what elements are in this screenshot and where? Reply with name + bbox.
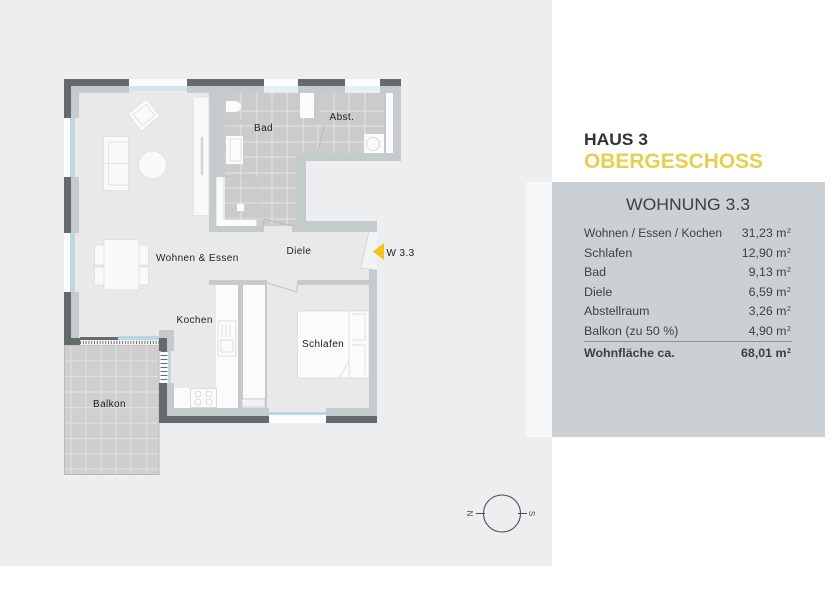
shower glass (223, 176, 257, 220)
row: total (584, 346, 791, 360)
row: Balkon: 2 (787, 326, 791, 333)
dining chairs (94, 245, 148, 285)
panel: apartment areas (552, 182, 825, 437)
row: Schlafen (584, 246, 791, 260)
row: Bad: Bad (584, 265, 606, 279)
row: Schlafen: Schlafen (584, 246, 632, 260)
toilet (226, 101, 241, 112)
row: Wohnen/Essen/Kochen: Wohnen / Essen / Kochen (584, 226, 722, 240)
row: Abstellraum: 3,26 m (749, 304, 786, 318)
row: Abstellraum: Abstellraum (584, 304, 649, 318)
row: Diele: 2 (787, 287, 791, 294)
dining table (104, 240, 139, 290)
round table (138, 151, 166, 179)
row: total: Wohnfläche ca. (584, 346, 675, 360)
shower tray (217, 177, 256, 226)
balcony (64, 345, 159, 475)
room labels (93, 112, 415, 410)
row: Bad: 9,13 m (749, 265, 786, 279)
compass S: S (527, 511, 536, 516)
row: total: 2 (787, 348, 791, 355)
title: Haus 3: HAUS 3 (584, 130, 648, 149)
light strip beside panel (526, 182, 552, 437)
row: Diele (584, 285, 791, 299)
interior and light walls (71, 86, 401, 416)
row: Diele: 6,59 m (749, 285, 786, 299)
compass N: N (465, 511, 474, 517)
row: Bad (584, 265, 791, 279)
floor plan (64, 79, 415, 475)
row: Wohnen/Essen/Kochen: 31,23 m (742, 226, 786, 240)
row: Balkon: Balkon (zu 50 %) (584, 324, 678, 338)
bed (298, 311, 369, 378)
row: Balkon (584, 324, 791, 338)
label: Bad: Bad (254, 123, 273, 134)
panel heading: WOHNUNG 3.3 (626, 195, 750, 214)
row: Bad: 2 (787, 267, 791, 274)
interior floor (71, 86, 377, 416)
row: Diele: Diele (584, 285, 612, 299)
closet (243, 285, 265, 398)
row: Wohnen/Essen/Kochen: 2 (787, 228, 791, 235)
label: Balkon: Balkon (93, 399, 126, 410)
kitchen counters (174, 285, 238, 408)
icon: entrance arrow (373, 243, 384, 260)
door swings (263, 125, 377, 292)
bathroom fixtures (217, 93, 393, 226)
row: total: 68,01 m (741, 346, 786, 360)
sofa (104, 136, 128, 190)
stove (190, 388, 216, 408)
title: Obergeschoss: OBERGESCHOSS (584, 150, 763, 173)
plan background panel (0, 0, 552, 566)
row: Abstellraum (584, 304, 791, 318)
living room furniture (94, 97, 209, 290)
armchair (128, 99, 160, 131)
label: W 3.3: W 3.3 (386, 248, 415, 259)
storage shelf (386, 93, 393, 153)
row: Schlafen: 12,90 m (742, 246, 786, 260)
row: Abstellraum: 2 (787, 306, 791, 313)
shower drain (237, 204, 244, 211)
label: Wohnen & Essen: Wohnen & Essen (156, 253, 239, 264)
kitchen (174, 285, 265, 408)
row: Schlafen: 2 (787, 248, 791, 255)
label: Kochen: Kochen (176, 315, 213, 326)
wardrobe (193, 97, 209, 216)
label: Schlafen: Schlafen (302, 339, 344, 350)
windows (64, 79, 380, 423)
washing machine (364, 134, 384, 153)
label: Abst.: Abst. (330, 112, 354, 123)
sink (218, 321, 236, 356)
washbasin (226, 136, 243, 164)
row: Wohnen/Essen/Kochen (584, 226, 791, 240)
label: Diele: Diele (286, 246, 311, 257)
storage fixture (300, 93, 314, 118)
row: Balkon: 4,90 m (749, 324, 786, 338)
balcony railing (80, 340, 168, 383)
compass (465, 495, 536, 532)
exterior dark walls (64, 79, 401, 423)
bathroom and storage tiles (225, 93, 386, 226)
entrance door leaf (361, 232, 377, 270)
